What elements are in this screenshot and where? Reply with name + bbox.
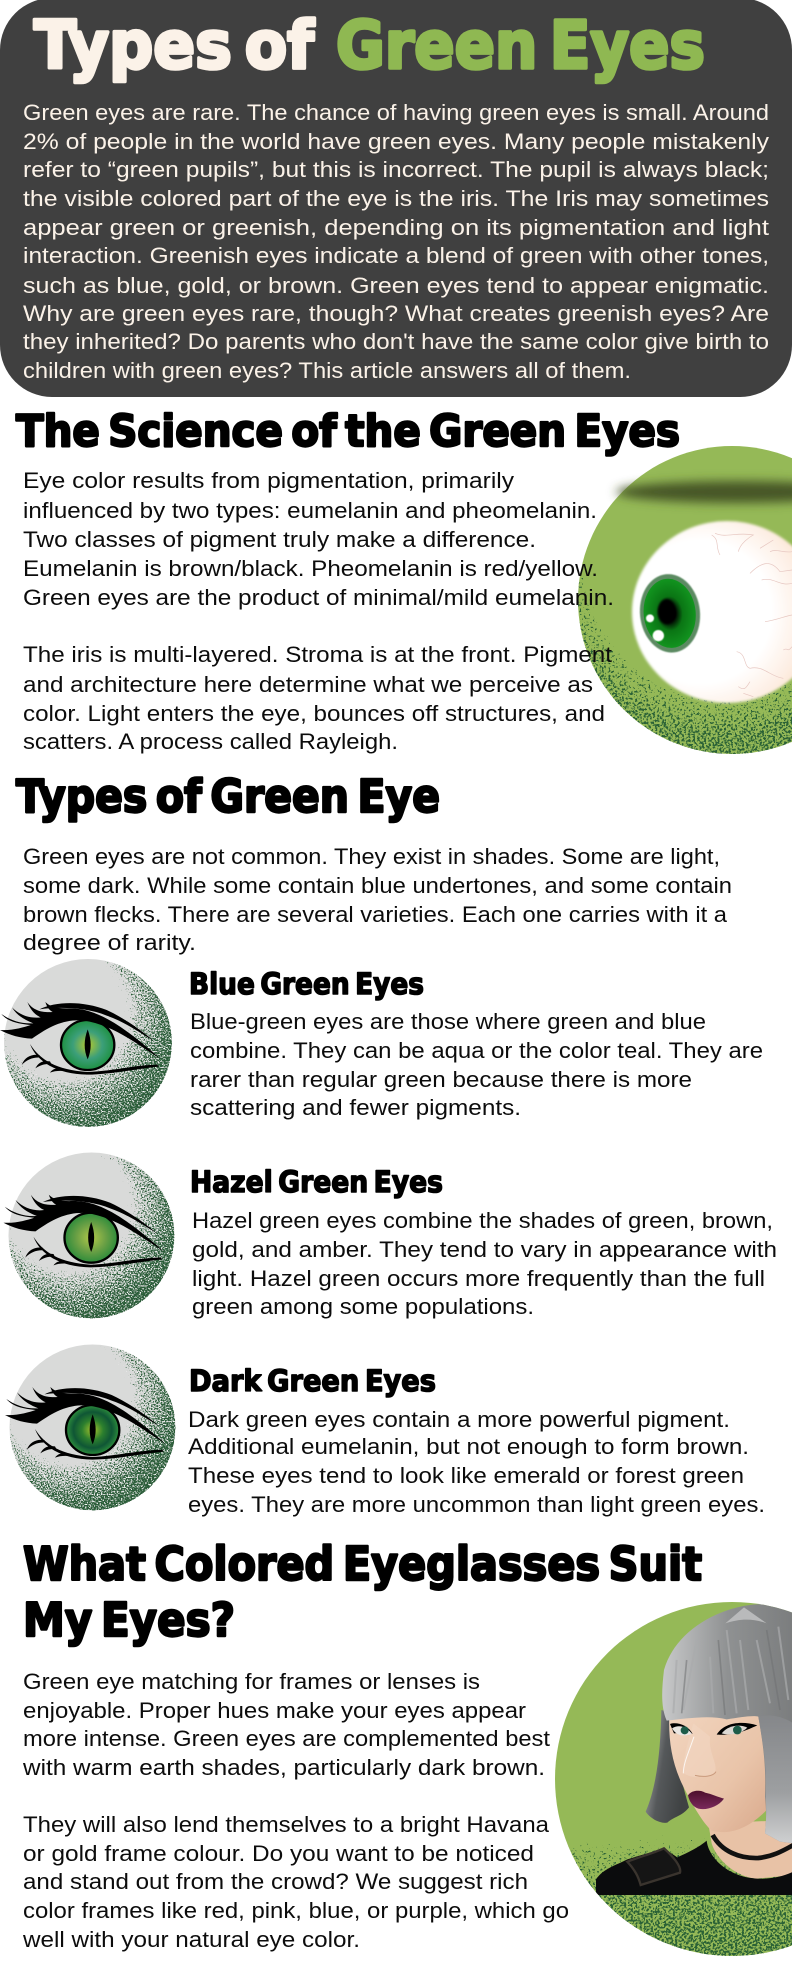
illustration: woman with silver hair in green circle (555, 1602, 792, 1960)
eyeglasses text: They will also lend themselves to a bright Havana (23, 1812, 550, 1837)
title (34, 7, 705, 84)
description (188, 1407, 765, 1517)
science paragraphs: Green eyes are the product of minimal/mild eumelanin. (23, 585, 614, 610)
intro paragraph: Green eyes are rare. The chance of having green eyes is small. Around (23, 100, 769, 125)
heading (23, 1537, 702, 1647)
illustration: eyeball in green circle (570, 440, 792, 760)
choker (713, 1835, 792, 1858)
heading: Dark Green Eyes (189, 1364, 436, 1398)
icon: dark green eye (5, 1344, 176, 1510)
description: Blue-green eyes are those where green and blue (190, 1009, 706, 1034)
science paragraphs: influenced by two types: eumelanin and pheomelanin. (23, 498, 597, 523)
heading: The Science of the Green Eyes (16, 406, 680, 457)
intro paragraph: appear green or greenish, depending on its pigmentation and light (23, 215, 769, 240)
eyes (670, 1723, 693, 1734)
panel: types of green eye (16, 770, 732, 955)
heading: My Eyes? (23, 1593, 235, 1647)
description: green among some populations. (192, 1294, 534, 1319)
eyeglasses text: well with your natural eye color. (22, 1927, 360, 1952)
eyeglasses text: Green eye matching for frames or lenses is (23, 1669, 480, 1694)
science paragraphs: Eye color results from pigmentation, primarily (23, 468, 514, 493)
description: rarer than regular green because there is more (190, 1067, 692, 1092)
intro paragraph: Why are green eyes rare, though? What creates greenish eyes? Are (23, 301, 769, 326)
description (192, 1208, 777, 1319)
icon: hazel green eye (4, 1152, 174, 1318)
eyeglasses text: or gold frame colour. Do you want to be noticed (23, 1841, 534, 1866)
intro paragraph (23, 100, 769, 383)
panel: introduction (0, 0, 792, 397)
eyeglasses text: more intense. Green eyes are complemented best (23, 1726, 550, 1751)
panel: science of green eyes (16, 406, 792, 760)
heading: Types of Green Eye (16, 770, 440, 823)
science paragraphs: scatters. A process called Rayleigh. (23, 729, 398, 754)
panel: hazel green eyes (4, 1152, 777, 1319)
types intro text: degree of rarity. (23, 930, 196, 955)
science paragraphs (23, 468, 614, 754)
intro paragraph: they inherited? Do parents who don't have the same color give birth to (23, 329, 769, 354)
description: scattering and fewer pigments. (190, 1095, 521, 1120)
heading: Blue Green Eyes (189, 967, 424, 1001)
title: Types of (34, 7, 315, 84)
lips (688, 1791, 724, 1809)
types intro text: some dark. While some contain blue undertones, and some contain (23, 873, 732, 898)
icon: blue green eye (0, 959, 172, 1127)
intro paragraph: 2% of people in the world have green eyes. Many people mistakenly (23, 129, 769, 154)
back hair left (646, 1710, 689, 1823)
science paragraphs: Eumelanin is brown/black. Pheomelanin is red/yellow. (23, 556, 598, 581)
science paragraphs: The iris is multi-layered. Stroma is at the front. Pigment (23, 642, 612, 667)
panel: blue green eyes (0, 959, 763, 1127)
nose shadow (695, 1772, 716, 1776)
top (596, 1841, 792, 1895)
hair main and bangs (662, 1603, 792, 1843)
eyeglasses text: and stand out from the crowd? We suggest rich (23, 1869, 528, 1894)
science paragraphs: Two classes of pigment truly make a difference. (23, 527, 536, 552)
description: Additional eumelanin, but not enough to form brown. (188, 1434, 749, 1459)
intro paragraph: the visible colored part of the eye is the iris. The Iris may sometimes (23, 186, 769, 211)
science paragraphs: and architecture here determine what we perceive as (23, 672, 593, 697)
description: combine. They can be aqua or the color teal. They are (190, 1038, 763, 1063)
panel background (0, 0, 792, 397)
panel: dark green eyes (5, 1344, 765, 1517)
description: gold, and amber. They tend to vary in appearance with (192, 1237, 777, 1262)
description: eyes. They are more uncommon than light green eyes. (188, 1492, 765, 1517)
eyeglasses text: enjoyable. Proper hues make your eyes appear (23, 1698, 526, 1723)
types intro text: brown flecks. There are several varieties. Each one carries with it a (23, 902, 728, 927)
description (190, 1009, 763, 1120)
description: These eyes tend to look like emerald or forest green (188, 1463, 744, 1488)
description: Dark green eyes contain a more powerful pigment. (188, 1407, 730, 1432)
description: light. Hazel green occurs more frequently than the full (192, 1266, 765, 1291)
science paragraphs: color. Light enters the eye, bounces off structures, and (23, 701, 605, 726)
intro paragraph: refer to “green pupils”, but this is incorrect. The pupil is always black; (23, 157, 769, 182)
heading: Hazel Green Eyes (190, 1165, 443, 1199)
panel: colored eyeglasses (22, 1537, 792, 1960)
description: Hazel green eyes combine the shades of green, brown, (192, 1208, 773, 1233)
eyeglasses text (22, 1669, 569, 1952)
neck (708, 1820, 792, 1879)
types intro text (23, 844, 732, 955)
intro paragraph: interaction. Greenish eyes indicate a blend of green with other tones, (23, 243, 769, 268)
intro paragraph: such as blue, gold, or brown. Green eyes tend to appear enigmatic. (23, 273, 769, 298)
title: Green Eyes (336, 7, 705, 84)
eyeglasses text: with warm earth shades, particularly dark brown. (22, 1755, 545, 1780)
intro paragraph: children with green eyes? This article answers all of them. (23, 358, 631, 383)
eyeglasses text: color frames like red, pink, blue, or purple, which go (23, 1898, 569, 1923)
types intro text: Green eyes are not common. They exist in shades. Some are light, (23, 844, 720, 869)
face (669, 1713, 767, 1832)
heading: What Colored Eyeglasses Suit (23, 1537, 702, 1591)
